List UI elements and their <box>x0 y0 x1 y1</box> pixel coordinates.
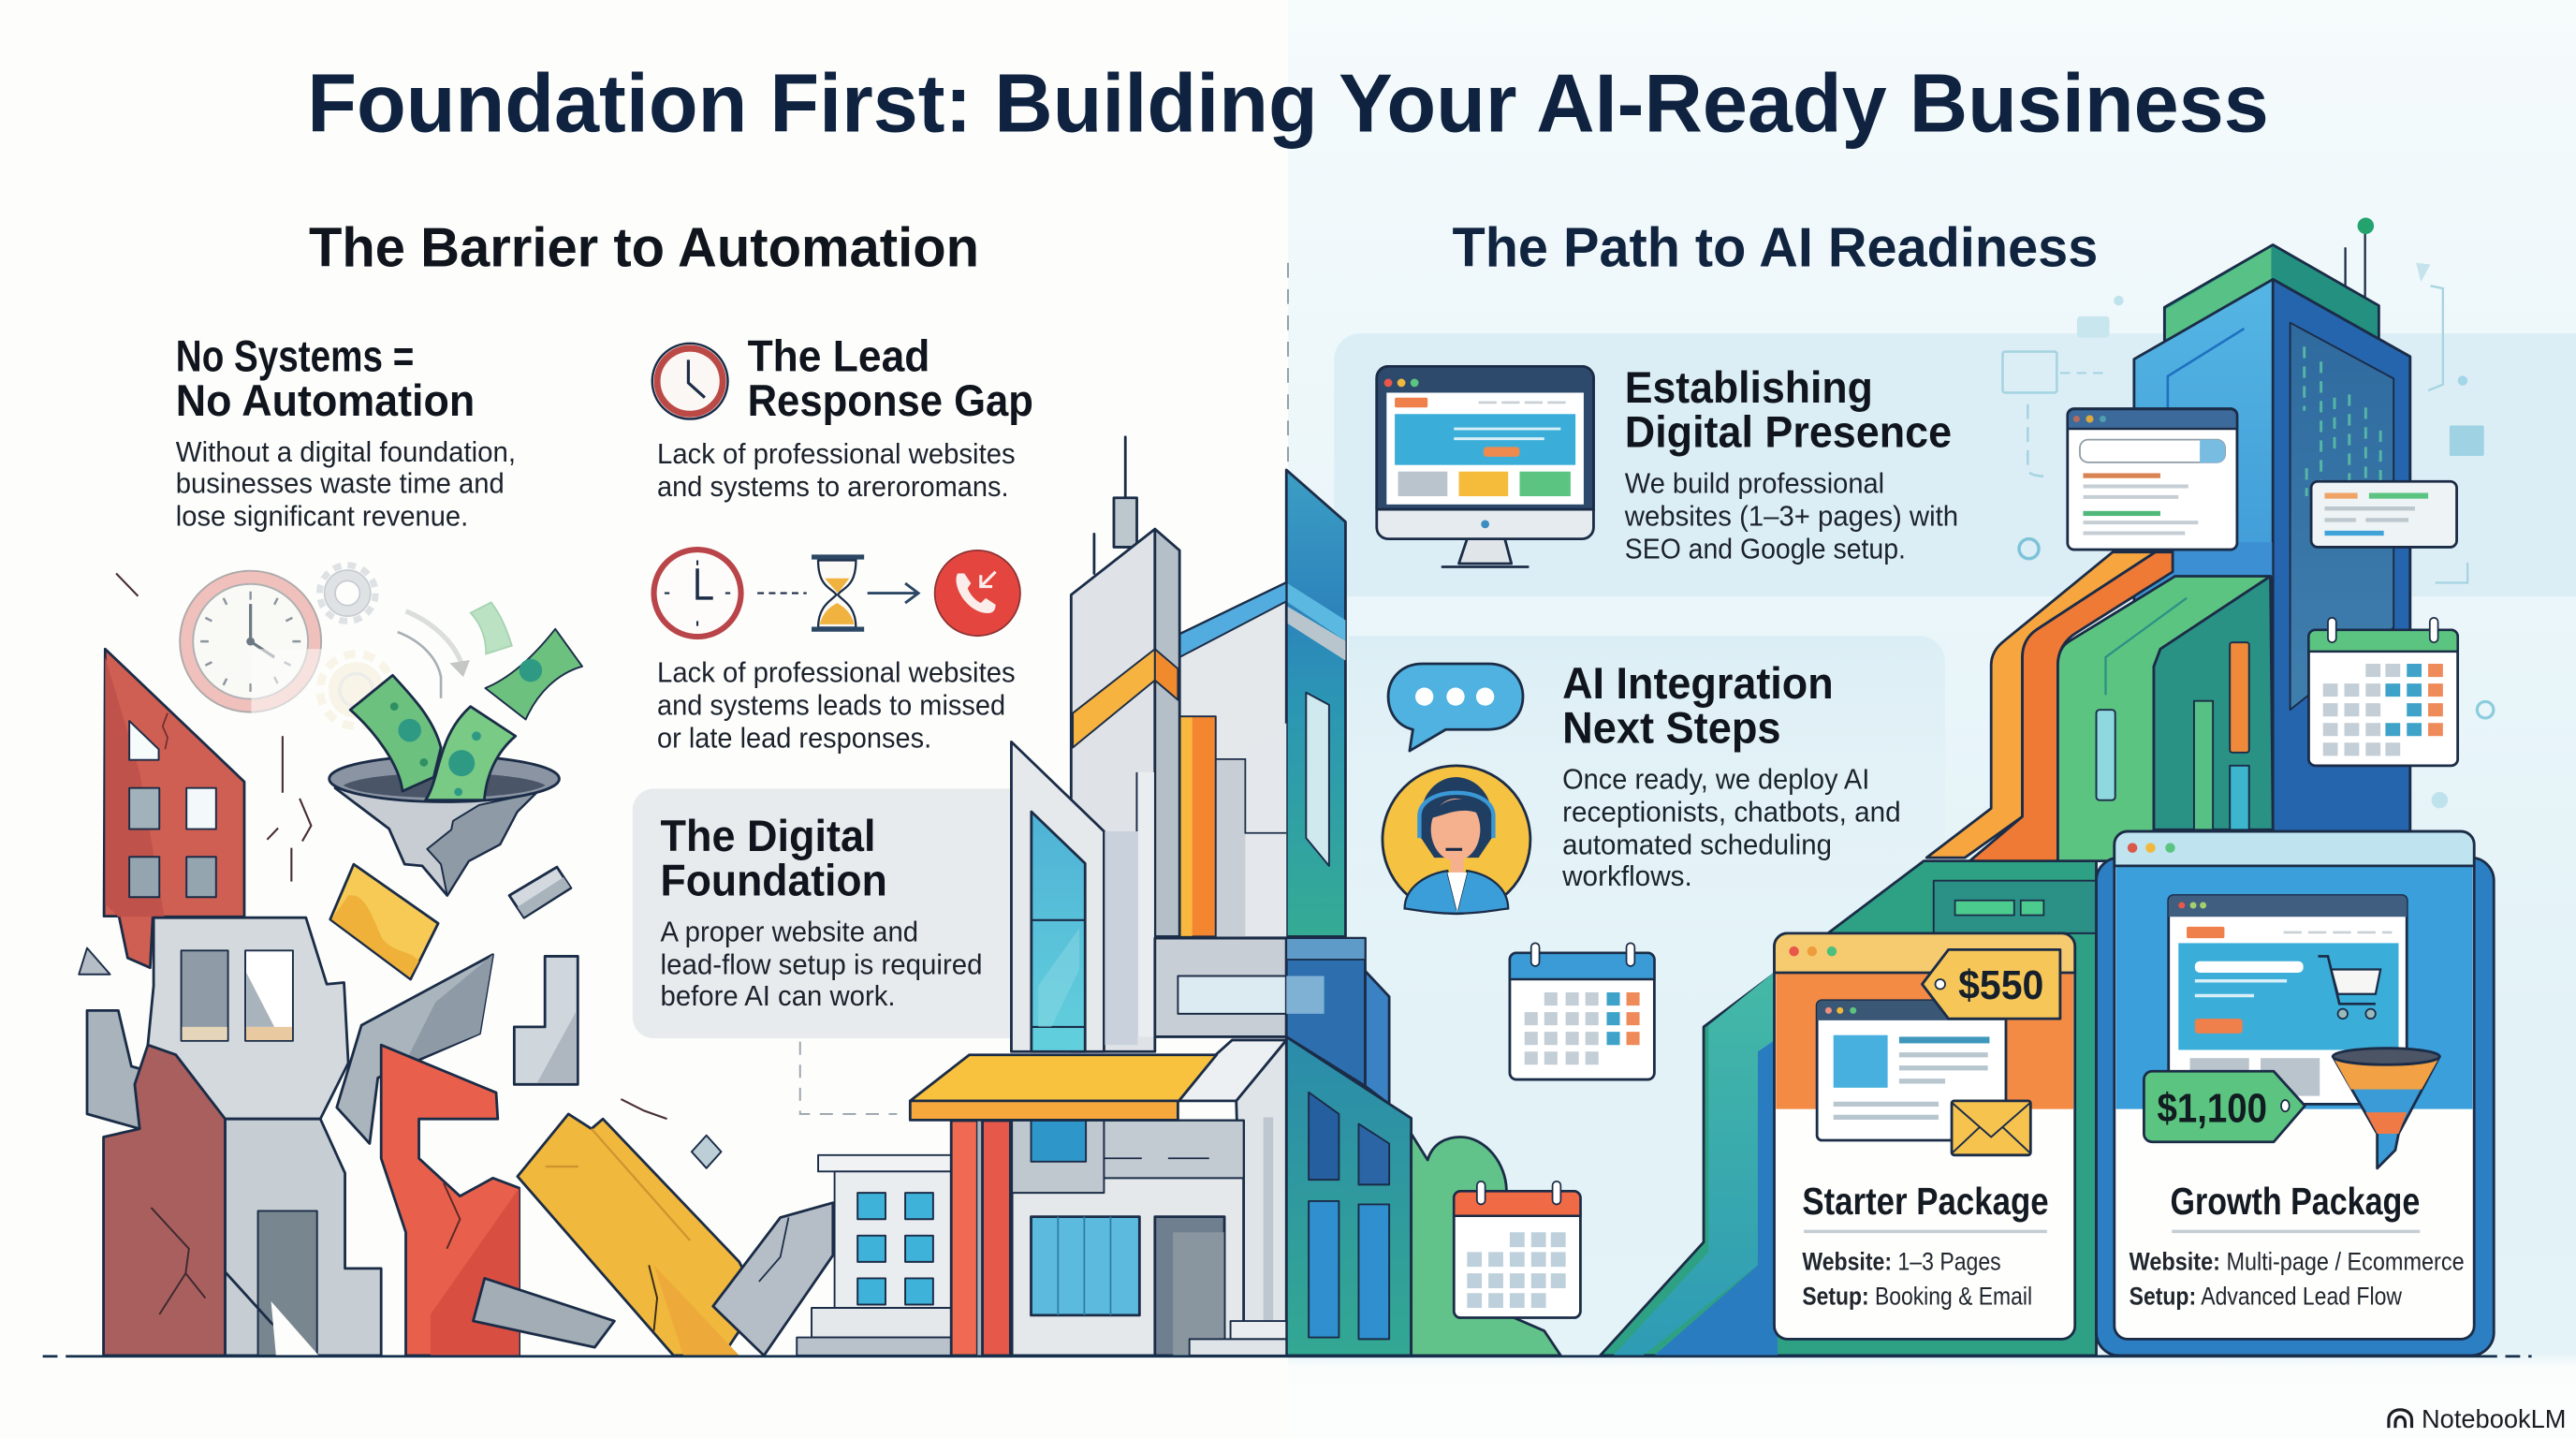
inner browser <box>2169 895 2407 1104</box>
text block: no systems no automation: lose significant revenue. <box>176 500 468 533</box>
grey big shard <box>337 955 493 1143</box>
growth text: Growth Package <box>2170 1180 2420 1223</box>
flying bill <box>485 629 582 720</box>
grey lower building <box>224 1119 381 1356</box>
panel: the digital foundation: Foundation <box>661 856 887 905</box>
starter text: Starter Package <box>1802 1180 2049 1223</box>
faded tan gear <box>320 654 392 726</box>
antenna <box>2346 218 2374 299</box>
price tag: $550 <box>1922 949 2060 1019</box>
text block: lead response gap: Lack of professional websites <box>657 437 1016 470</box>
panel: the digital foundation <box>633 788 1035 1038</box>
icon: funnel <box>2333 1049 2439 1168</box>
floating ui accents <box>2002 263 2494 808</box>
icon: dashed connector <box>757 593 807 594</box>
text block: no systems no automation: businesses waste time and <box>176 467 505 500</box>
grey central building <box>148 917 348 1119</box>
grey right rubble <box>713 1203 833 1356</box>
text block: lead response gap: and systems to areroromans. <box>657 470 1009 503</box>
teal front building <box>1286 1036 1412 1356</box>
background: right half tint <box>1288 0 2576 1438</box>
price tag: $550: $550 <box>1958 962 2043 1008</box>
grey wall chunk <box>87 1010 143 1129</box>
yellow fallen slab <box>518 1114 759 1356</box>
crumbling red building <box>104 649 244 968</box>
illustration: tech tower and pipelines <box>1600 218 2494 1356</box>
funnel bowl <box>329 756 559 895</box>
panel: growth package <box>2115 831 2474 1339</box>
red columns <box>951 1121 1010 1356</box>
grey L block <box>514 956 578 1084</box>
text block: lead response explanation: and systems leads to missed <box>657 688 1005 721</box>
title: Foundation First: Building Your AI-Ready Business <box>307 57 2269 149</box>
price tag: $1,100 <box>2144 1071 2305 1142</box>
icon: delay clock <box>654 550 741 637</box>
growth package back panel <box>2097 858 2494 1356</box>
icon: calendar red <box>1454 1181 1580 1318</box>
pipeline: light orange <box>1926 552 2156 858</box>
yellow canopy <box>910 1055 1217 1120</box>
red tilted wall <box>381 1045 520 1356</box>
icon: calendar green <box>2308 618 2458 766</box>
pipeline: dark teal <box>2097 576 2273 829</box>
debris diamond <box>692 1136 721 1168</box>
text block: establishing digital presence: We build professional <box>1625 467 1884 500</box>
text block: no systems no automation: No Systems = <box>176 332 414 382</box>
pipeline: dark orange <box>1969 552 2173 861</box>
icon: monitor with website <box>1377 366 1593 566</box>
text block: AI integration next steps: receptionists, chatbots, and <box>1562 796 1901 829</box>
faded clock <box>180 571 329 723</box>
text block: lead response gap: The Lead <box>748 332 929 382</box>
panel: the digital foundation: before AI can work. <box>661 979 896 1012</box>
icon: cart <box>2318 956 2380 1019</box>
illustration: crumbling business <box>79 565 833 1356</box>
text block: AI integration next steps: AI Integration <box>1562 659 1834 709</box>
panel: establishing digital presence band <box>1334 333 2576 596</box>
text block: AI integration next steps: automated scheduling <box>1562 829 1832 861</box>
green bush <box>1412 1134 1560 1356</box>
falling yellow block <box>330 864 438 979</box>
grey roof and side wall <box>1178 1040 1286 1356</box>
text block: establishing digital presence: websites (1–3+ pages) with <box>1624 500 1958 533</box>
text block: AI integration next steps: Once ready, we deploy AI <box>1562 762 1869 795</box>
text block: lead response explanation: Lack of professional websites <box>657 655 1016 688</box>
icon: small data card <box>2311 481 2457 547</box>
money falling into funnel <box>350 675 516 800</box>
text block: establishing digital presence: SEO and Google setup. <box>1625 533 1906 565</box>
growth text <box>2130 1180 2465 1310</box>
text block: lead response gap: Response Gap <box>748 376 1033 426</box>
debris lines <box>116 574 667 1119</box>
dashed connector: foundation to building <box>800 1042 897 1114</box>
panel: the digital foundation: A proper website and <box>661 916 918 948</box>
icon: browser search card <box>2068 408 2237 550</box>
blue tower <box>2134 244 2410 838</box>
icon: envelope <box>1952 1101 2030 1155</box>
divider <box>1287 263 1289 479</box>
icon: lead response clock <box>652 344 728 419</box>
text block: AI integration next steps: Next Steps <box>1562 703 1781 753</box>
falling grey block <box>509 867 571 917</box>
icon: receptionist avatar <box>1383 766 1530 914</box>
collapsed brown wall <box>104 1045 225 1356</box>
panel: the digital foundation: lead-flow setup is required <box>661 948 983 981</box>
heading: the barrier to automation: The Barrier to Automation <box>309 215 979 278</box>
notebooklm mark: NotebookLM <box>2422 1404 2566 1433</box>
lower glass and door building <box>1012 1121 1286 1356</box>
teal-blue back tower <box>1286 470 1345 936</box>
heading: the path to AI readiness: The Path to AI Readiness <box>1453 215 2098 278</box>
panel: the digital foundation: The Digital <box>661 812 875 861</box>
text block: establishing digital presence: Establishing <box>1625 363 1873 413</box>
panel: AI integration band <box>1349 636 1945 986</box>
text block: no systems no automation <box>176 332 516 533</box>
small building with windows <box>797 1155 953 1356</box>
text block: lead response explanation <box>657 655 1016 755</box>
text block: establishing digital presence <box>1624 363 1958 565</box>
lower block with window band <box>1155 938 1389 1104</box>
text block: establishing digital presence: Digital Presence <box>1625 407 1952 457</box>
starter text <box>1802 1180 2049 1310</box>
icon: chat bubble <box>1388 664 1523 751</box>
faded bill <box>471 602 512 654</box>
starter text: Setup: Booking & Email <box>1802 1282 2032 1310</box>
price tag: $1,100: $1,100 <box>2157 1086 2267 1132</box>
debris triangle <box>79 948 110 975</box>
text block: no systems no automation: No Automation <box>176 376 475 426</box>
arrow: to missed call <box>868 583 918 603</box>
text block: AI integration next steps: workflows. <box>1561 859 1692 892</box>
main grey tower <box>1071 437 1179 1051</box>
illustration: new building complex <box>797 437 1412 1356</box>
text block: AI integration next steps <box>1561 659 1901 892</box>
starter text: Website: 1–3 Pages <box>1802 1248 2001 1276</box>
ground line <box>43 1356 2532 1357</box>
growth text: Setup: Advanced Lead Flow <box>2130 1282 2402 1310</box>
text block: no systems no automation: Without a digital foundation, <box>176 435 516 468</box>
icon: missed call <box>935 550 1020 636</box>
text block: lead response gap <box>657 332 1033 503</box>
panel: starter package <box>1775 933 2075 1339</box>
glass tall building <box>1011 741 1137 1051</box>
faded gear <box>319 565 375 621</box>
pipeline: blue backing <box>2172 542 2272 577</box>
growth text: Website: Multi-page / Ecommerce <box>2130 1248 2465 1276</box>
icon: hourglass <box>812 557 864 629</box>
inner browser <box>1817 1001 2006 1140</box>
text block: lead response explanation: or late lead responses. <box>657 722 931 755</box>
grey fallen piece <box>473 1278 614 1347</box>
icon: calendar blue <box>1510 943 1654 1079</box>
grey back building <box>1179 582 1286 936</box>
pipeline: green <box>2057 576 2271 861</box>
arrow: money falling <box>398 611 470 698</box>
lower teal base and strips <box>1600 861 2097 1356</box>
